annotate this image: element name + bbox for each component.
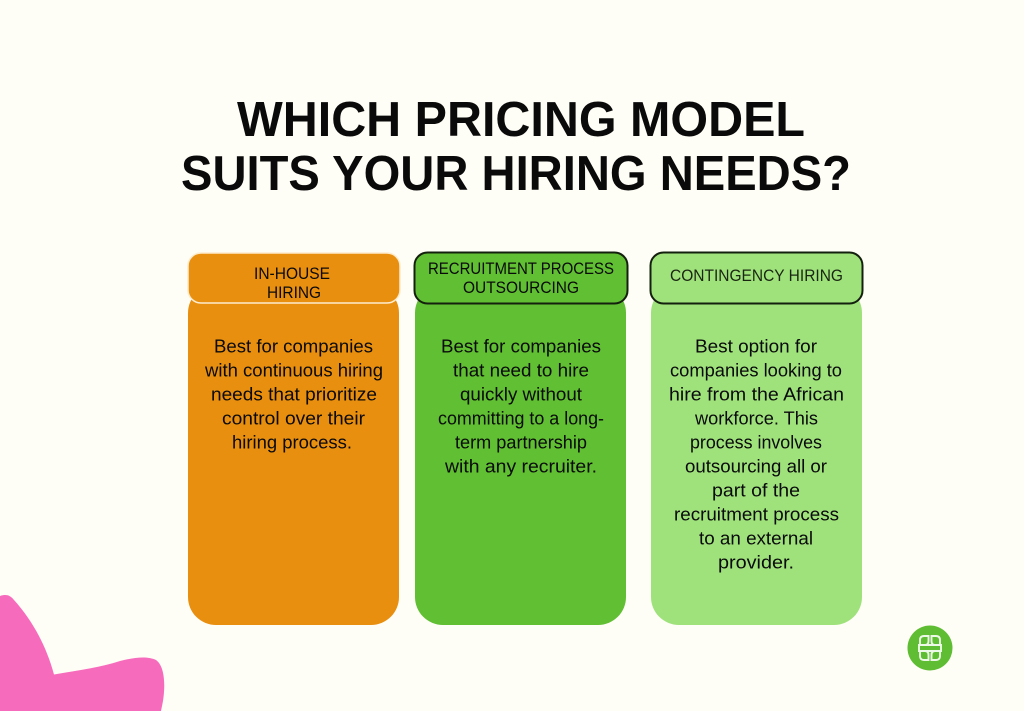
description: RPO: that need to hire bbox=[453, 360, 589, 380]
description: contingency: hire from the African bbox=[669, 384, 844, 404]
card body: contingency bbox=[651, 285, 862, 625]
title: WHICH PRICING MODEL bbox=[237, 93, 805, 147]
header: in-house hiring: HIRING bbox=[267, 284, 321, 302]
panel: recruitment process outsourcing bbox=[414, 252, 628, 625]
description: in-house bbox=[204, 336, 383, 452]
description: contingency: companies looking to bbox=[670, 360, 842, 380]
header: recruitment process outsourcing bbox=[414, 252, 628, 304]
description: in-house: control over their bbox=[222, 408, 365, 428]
panel: in-house hiring bbox=[188, 253, 400, 625]
description: contingency: Best option for bbox=[695, 336, 817, 356]
description: RPO: with any recruiter. bbox=[444, 456, 597, 476]
description: RPO: Best for companies bbox=[441, 336, 601, 356]
description: contingency: provider. bbox=[718, 552, 794, 572]
description: contingency: outsourcing all or bbox=[685, 456, 827, 476]
description: in-house: needs that prioritize bbox=[211, 384, 377, 404]
icon: logo badge bbox=[908, 626, 952, 670]
title: SUITS YOUR HIRING NEEDS? bbox=[181, 147, 851, 201]
header: recruitment process outsourcing: OUTSOURCING bbox=[463, 279, 579, 297]
description: contingency: recruitment process bbox=[674, 504, 839, 524]
description: RPO: term partnership bbox=[455, 432, 587, 452]
card body: in-house bbox=[188, 285, 399, 625]
description: contingency: to an external bbox=[699, 528, 813, 548]
header: in-house hiring bbox=[188, 253, 400, 303]
description: contingency bbox=[669, 336, 844, 572]
description: contingency: workforce. This bbox=[694, 408, 818, 428]
header: in-house hiring: IN-HOUSE bbox=[254, 265, 330, 283]
header: recruitment process outsourcing: RECRUITMENT PROCESS bbox=[428, 260, 614, 278]
description: contingency: process involves bbox=[690, 432, 822, 452]
description: RPO: quickly without bbox=[460, 384, 582, 404]
panel: contingency hiring bbox=[650, 252, 862, 625]
description: in-house: with continuous hiring bbox=[204, 360, 383, 380]
header: contingency hiring: CONTINGENCY HIRING bbox=[670, 267, 843, 285]
title bbox=[181, 93, 851, 201]
decorative pink blob bbox=[0, 595, 164, 711]
description: RPO: committing to a long- bbox=[438, 408, 604, 428]
description: RPO bbox=[438, 336, 604, 476]
description: in-house: hiring process. bbox=[232, 432, 352, 452]
header: contingency hiring bbox=[650, 252, 862, 304]
description: contingency: part of the bbox=[712, 480, 800, 500]
description: in-house: Best for companies bbox=[214, 336, 373, 356]
card body: RPO bbox=[415, 285, 626, 625]
